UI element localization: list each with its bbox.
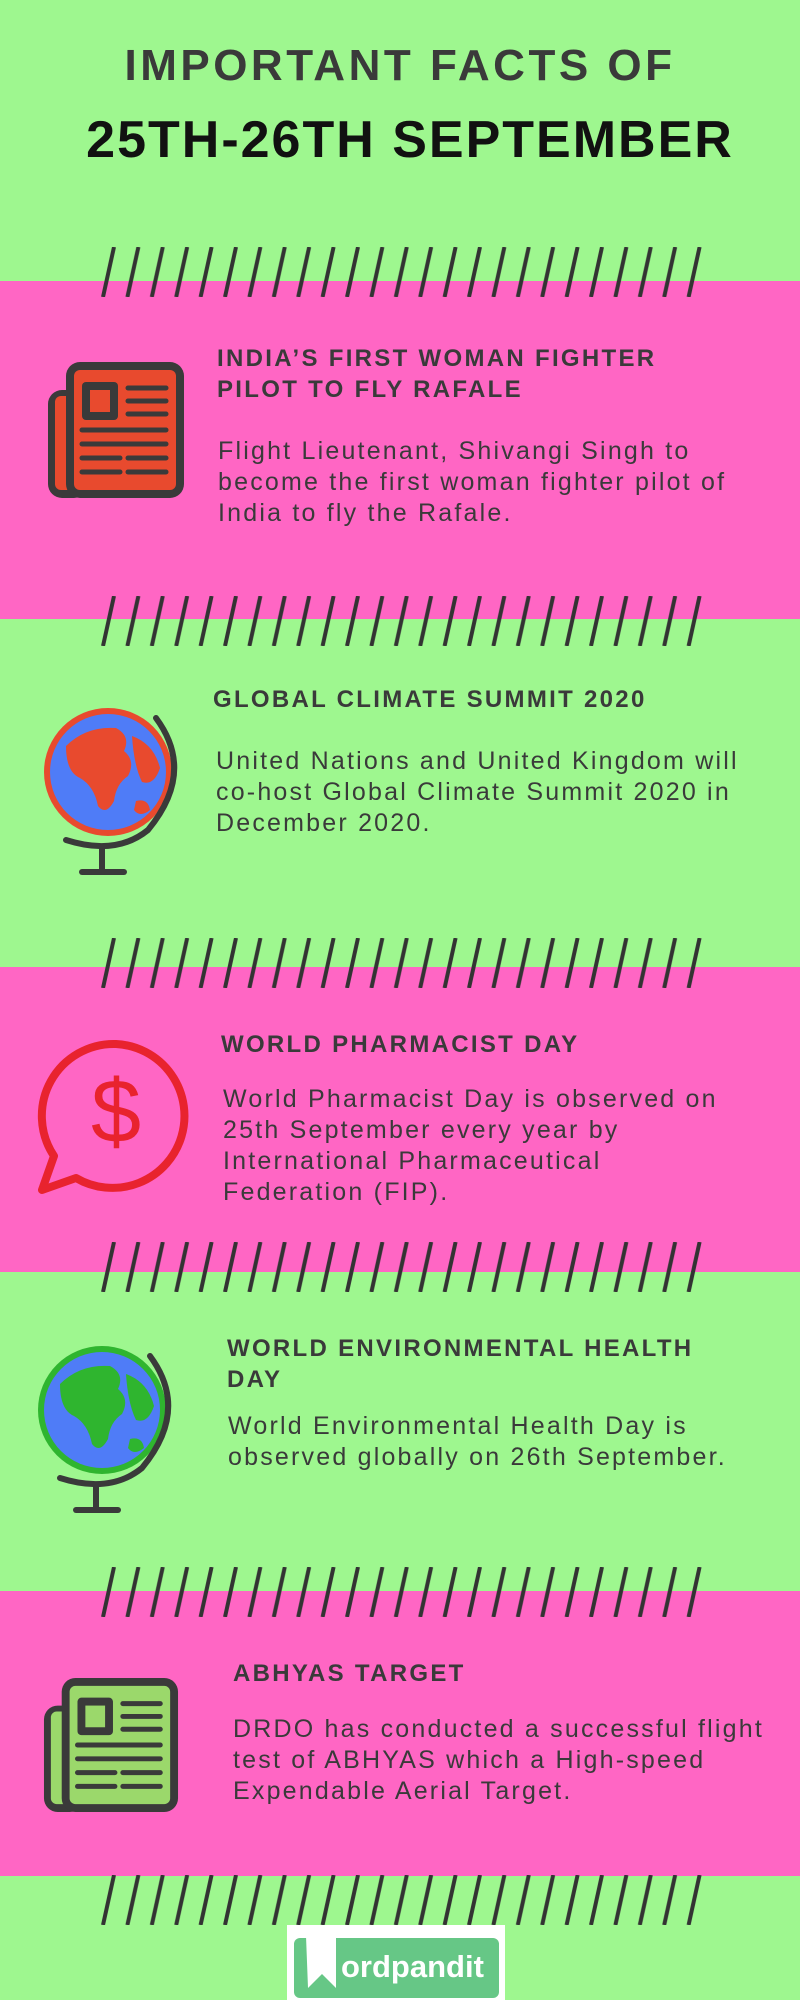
divider slashes 3	[101, 938, 702, 988]
text 4	[228, 1412, 727, 1471]
text 3	[223, 1085, 718, 1206]
icon: globe green	[38, 1346, 172, 1513]
icon: dollar speech bubble: $	[91, 1062, 141, 1162]
text 1: Flight Lieutenant, Shivangi Singh to	[218, 437, 691, 465]
icon: newspaper orange	[48, 362, 184, 498]
title	[86, 41, 734, 169]
heading 3: WORLD PHARMACIST DAY	[221, 1031, 579, 1058]
icon: dollar speech bubble	[38, 1040, 188, 1194]
text 4: World Environmental Health Day is	[228, 1412, 688, 1440]
text 2: United Nations and United Kingdom will	[216, 747, 739, 775]
logo: wordpandit	[287, 1925, 505, 2000]
text 3: Federation (FIP).	[223, 1178, 449, 1206]
heading 5: ABHYAS TARGET	[233, 1660, 466, 1687]
divider slashes 6	[101, 1875, 702, 1925]
heading 1	[217, 345, 656, 403]
text 5: DRDO has conducted a successful flight	[233, 1715, 764, 1743]
title: IMPORTANT FACTS OF	[124, 41, 676, 90]
heading 4	[227, 1335, 693, 1393]
text 3: World Pharmacist Day is observed on	[223, 1085, 718, 1113]
text 2: co-host Global Climate Summit 2020 in	[216, 778, 731, 806]
icon: newspaper green	[44, 1678, 178, 1812]
heading 2: GLOBAL CLIMATE SUMMIT 2020	[213, 686, 647, 713]
icon: globe orange	[44, 708, 178, 875]
divider slashes 1	[101, 247, 702, 297]
text 5: test of ABHYAS which a High-speed	[233, 1746, 705, 1774]
divider slashes 2	[101, 596, 702, 646]
text 5	[233, 1715, 764, 1805]
panel: pink band 1	[0, 281, 800, 619]
heading 1: PILOT TO FLY RAFALE	[217, 376, 523, 403]
text 4: observed globally on 26th September.	[228, 1443, 727, 1471]
text 2: December 2020.	[216, 809, 432, 837]
text 3: International Pharmaceutical	[223, 1147, 601, 1175]
heading 1: INDIA’S FIRST WOMAN FIGHTER	[217, 345, 656, 372]
panel: pink band 5	[0, 1591, 800, 1876]
heading 4: DAY	[227, 1366, 282, 1393]
title: 25TH-26TH SEPTEMBER	[86, 111, 734, 169]
divider slashes 5	[101, 1567, 702, 1617]
divider slashes 4	[101, 1242, 702, 1292]
text 1: become the first woman fighter pilot of	[218, 468, 726, 496]
text 2	[216, 747, 739, 837]
text 1: India to fly the Rafale.	[218, 499, 513, 527]
heading 4: WORLD ENVIRONMENTAL HEALTH	[227, 1335, 693, 1362]
text 3: 25th September every year by	[223, 1116, 620, 1144]
logo: wordpandit: ordpandit	[341, 1949, 484, 1984]
panel: pink band 3	[0, 967, 800, 1272]
text 1	[218, 437, 726, 527]
text 5: Expendable Aerial Target.	[233, 1777, 572, 1805]
